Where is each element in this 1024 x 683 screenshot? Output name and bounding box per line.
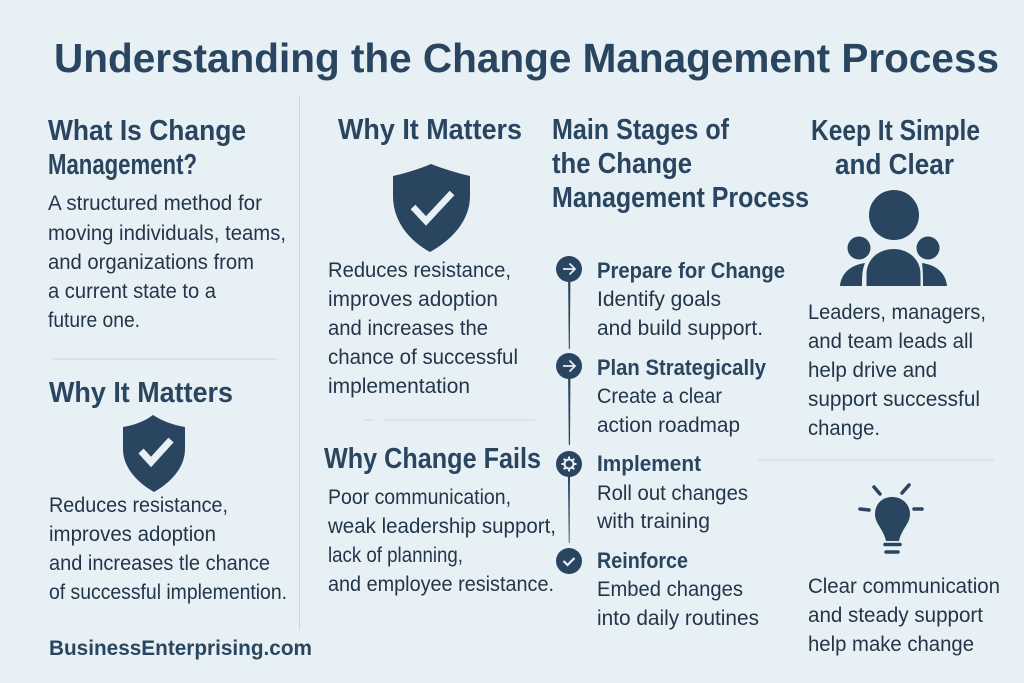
heading: keep it simple: Keep It Simple	[811, 115, 980, 147]
text block: definition	[48, 191, 286, 332]
stage 3: implement: with training	[596, 509, 710, 533]
text block: leaders	[808, 300, 986, 440]
text block: why it matters center: and increases the	[328, 316, 488, 340]
text block: why it matters left: and increases tle chance	[49, 551, 270, 575]
heading: why it matters center: Why It Matters	[338, 114, 522, 146]
stage 3: implement: Implement	[597, 451, 702, 476]
text block: why it matters center: improves adoption	[328, 287, 498, 311]
stage 2: plan strategically: Create a clear	[597, 384, 722, 408]
heading: why it matters left: Why It Matters	[49, 377, 233, 409]
panel: what is change management	[48, 115, 286, 332]
text block: definition: and organizations from	[48, 250, 254, 274]
text block: why it matters center	[328, 258, 518, 398]
stage 4: reinforce: Reinforce	[597, 548, 688, 573]
panel: main stages	[552, 114, 809, 630]
text block: why it matters left: improves adoption	[49, 522, 216, 546]
panel: why it matters center	[328, 114, 522, 398]
text block: why change fails: weak leadership support,	[327, 514, 556, 538]
text block: leaders: change.	[808, 416, 880, 440]
icon: shield with check left	[123, 415, 185, 492]
icon: light bulb	[860, 485, 922, 552]
text block: definition: future one.	[48, 308, 140, 332]
heading: main stages	[552, 114, 809, 214]
stage 1: prepare for change: Identify goals	[597, 287, 721, 311]
stage 2: plan strategically: Plan Strategically	[597, 355, 767, 380]
heading: keep it simple	[811, 115, 980, 181]
stage 1: prepare for change: and build support.	[597, 316, 763, 340]
text block: clear communication	[808, 574, 1000, 656]
heading: main stages: Management Process	[552, 182, 809, 214]
text block: clear communication: and steady support	[808, 603, 983, 627]
heading: keep it simple: and Clear	[835, 149, 954, 181]
heading: why change fails: Why Change Fails	[324, 443, 541, 475]
text block: why change fails: Poor communication,	[328, 485, 511, 509]
text block: leaders: and team leads all	[808, 329, 973, 353]
stage 1: prepare for change: Prepare for Change	[597, 258, 785, 283]
text block: why it matters left: of successful implemention.	[49, 580, 287, 604]
heading: what is change management	[48, 115, 246, 181]
heading: main stages: the Change	[552, 148, 692, 180]
footer: website: BusinessEnterprising.com	[49, 637, 312, 660]
text block: why it matters center: implementation	[328, 374, 470, 398]
text block: definition: A structured method for	[48, 191, 262, 215]
text block: why change fails: and employee resistance.	[328, 572, 554, 596]
text block: leaders: Leaders, managers,	[808, 300, 986, 324]
icon: shield with check center	[393, 164, 470, 252]
text block: why change fails: lack of planning,	[328, 543, 463, 567]
panel: why change fails	[324, 443, 556, 596]
stage 3: implement	[556, 451, 748, 533]
stage 2: plan strategically	[556, 353, 767, 437]
heading: what is change management: Management?	[48, 149, 197, 181]
text block: why it matters left: Reduces resistance,	[49, 493, 228, 517]
stage 4: reinforce: into daily routines	[597, 606, 759, 630]
text block: leaders: help drive and	[808, 358, 937, 382]
timeline line	[568, 270, 570, 543]
text block: clear communication: help make change	[808, 632, 974, 656]
stage 4: reinforce: Embed changes	[597, 577, 743, 601]
text block: why it matters left	[49, 493, 287, 604]
text block: why it matters center: chance of successful	[328, 345, 518, 369]
stage 2: plan strategically: action roadmap	[597, 413, 740, 437]
text block: clear communication: Clear communication	[808, 574, 1000, 598]
panel: keep it simple and clear	[808, 115, 1000, 656]
stage 1: prepare for change	[556, 256, 785, 340]
text block: definition: moving individuals, teams,	[48, 221, 286, 245]
heading: main stages: Main Stages of	[552, 114, 729, 146]
stage 3: implement: Roll out changes	[597, 481, 748, 505]
title: Understanding the Change Management Process	[54, 35, 999, 81]
text block: why change fails	[327, 485, 556, 596]
heading: what is change management: What Is Change	[48, 115, 246, 147]
panel: why it matters left	[49, 377, 287, 604]
text block: definition: a current state to a	[48, 279, 216, 303]
text block: leaders: support successful	[808, 387, 980, 411]
icon: people group	[840, 190, 947, 286]
text block: why it matters center: Reduces resistance,	[328, 258, 511, 282]
stage 4: reinforce	[556, 548, 759, 630]
